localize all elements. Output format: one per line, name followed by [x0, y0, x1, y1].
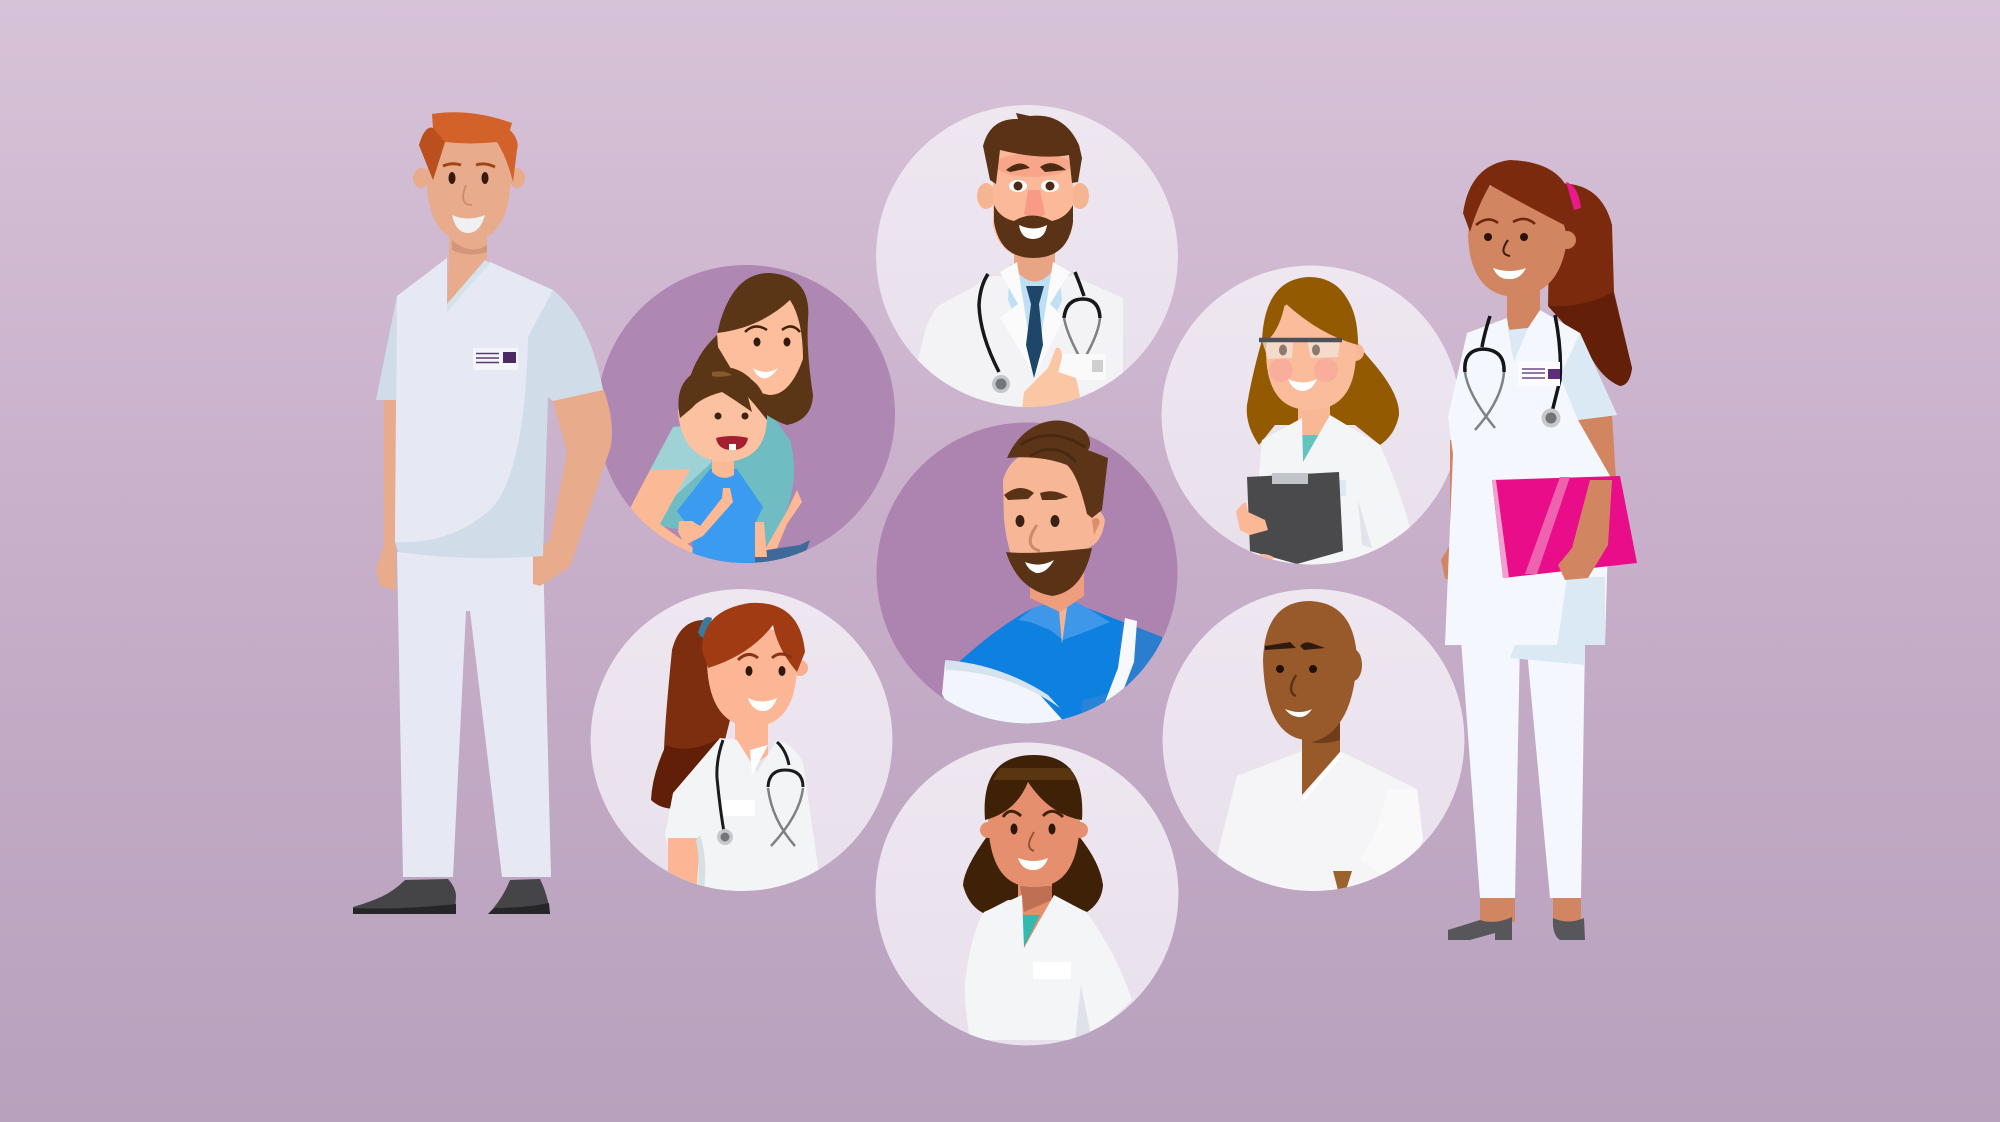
ponytail [1548, 183, 1632, 386]
figure: male nurse [353, 112, 612, 914]
circle: nurse with ponytail [590, 589, 892, 900]
circle: bald man in white coat [1162, 589, 1464, 900]
icon: pink folder [1492, 476, 1637, 578]
circle: young woman doctor [876, 742, 1178, 1046]
figure: female nurse with folder [1441, 160, 1637, 940]
circle: patient in blue shirt [876, 420, 1178, 724]
circle: doctor with glasses and clipboard [1162, 266, 1460, 570]
icon: shoes [353, 879, 550, 914]
name badge [1518, 362, 1560, 386]
circle: doctor with beard [876, 105, 1178, 420]
shoes and legs [1448, 640, 1585, 940]
icon: stethoscope [1465, 315, 1560, 430]
name badge [473, 348, 518, 370]
circle: mother and child [597, 265, 895, 570]
